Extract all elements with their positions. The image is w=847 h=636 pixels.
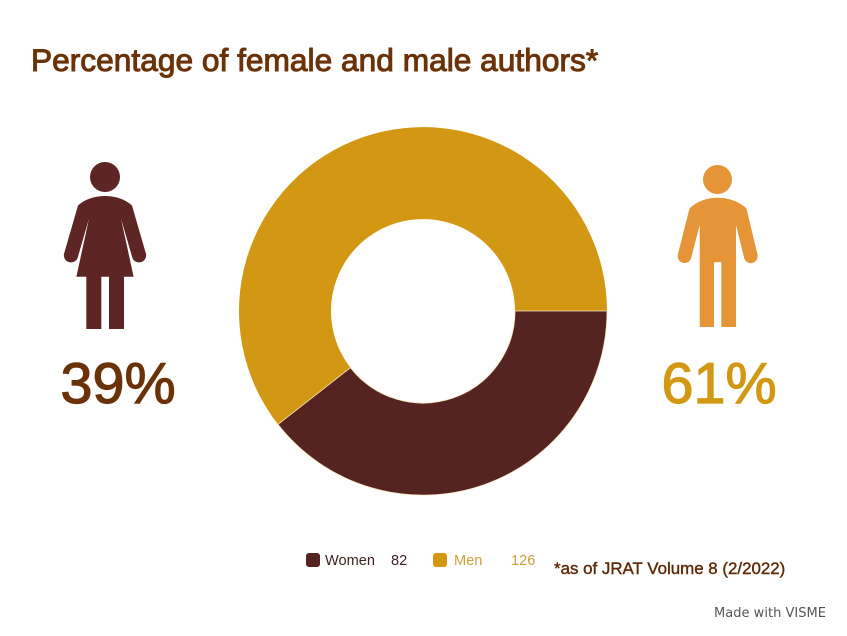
donut chart [239,127,607,495]
stat: women 39%: 39% [60,352,176,416]
credit: made with visme: Made with VISME [714,606,826,621]
legend item: men: 126 [511,553,535,569]
icon: woman figure [64,162,146,329]
icon: man figure [678,165,758,327]
footnote: *as of JRAT Volume 8 (2/2022) [554,559,785,578]
legend item: men [433,553,535,569]
legend item: women: 82 [391,553,407,569]
stat: men 61%: 61% [662,352,777,416]
legend item: women: Women [325,553,375,569]
legend item: men: Men [454,553,482,569]
legend item: women [306,553,407,569]
title: Percentage of female and male authors* [31,42,598,78]
legend [306,553,535,569]
segment: women 39% [278,311,607,495]
segment: men 61% [239,127,607,424]
